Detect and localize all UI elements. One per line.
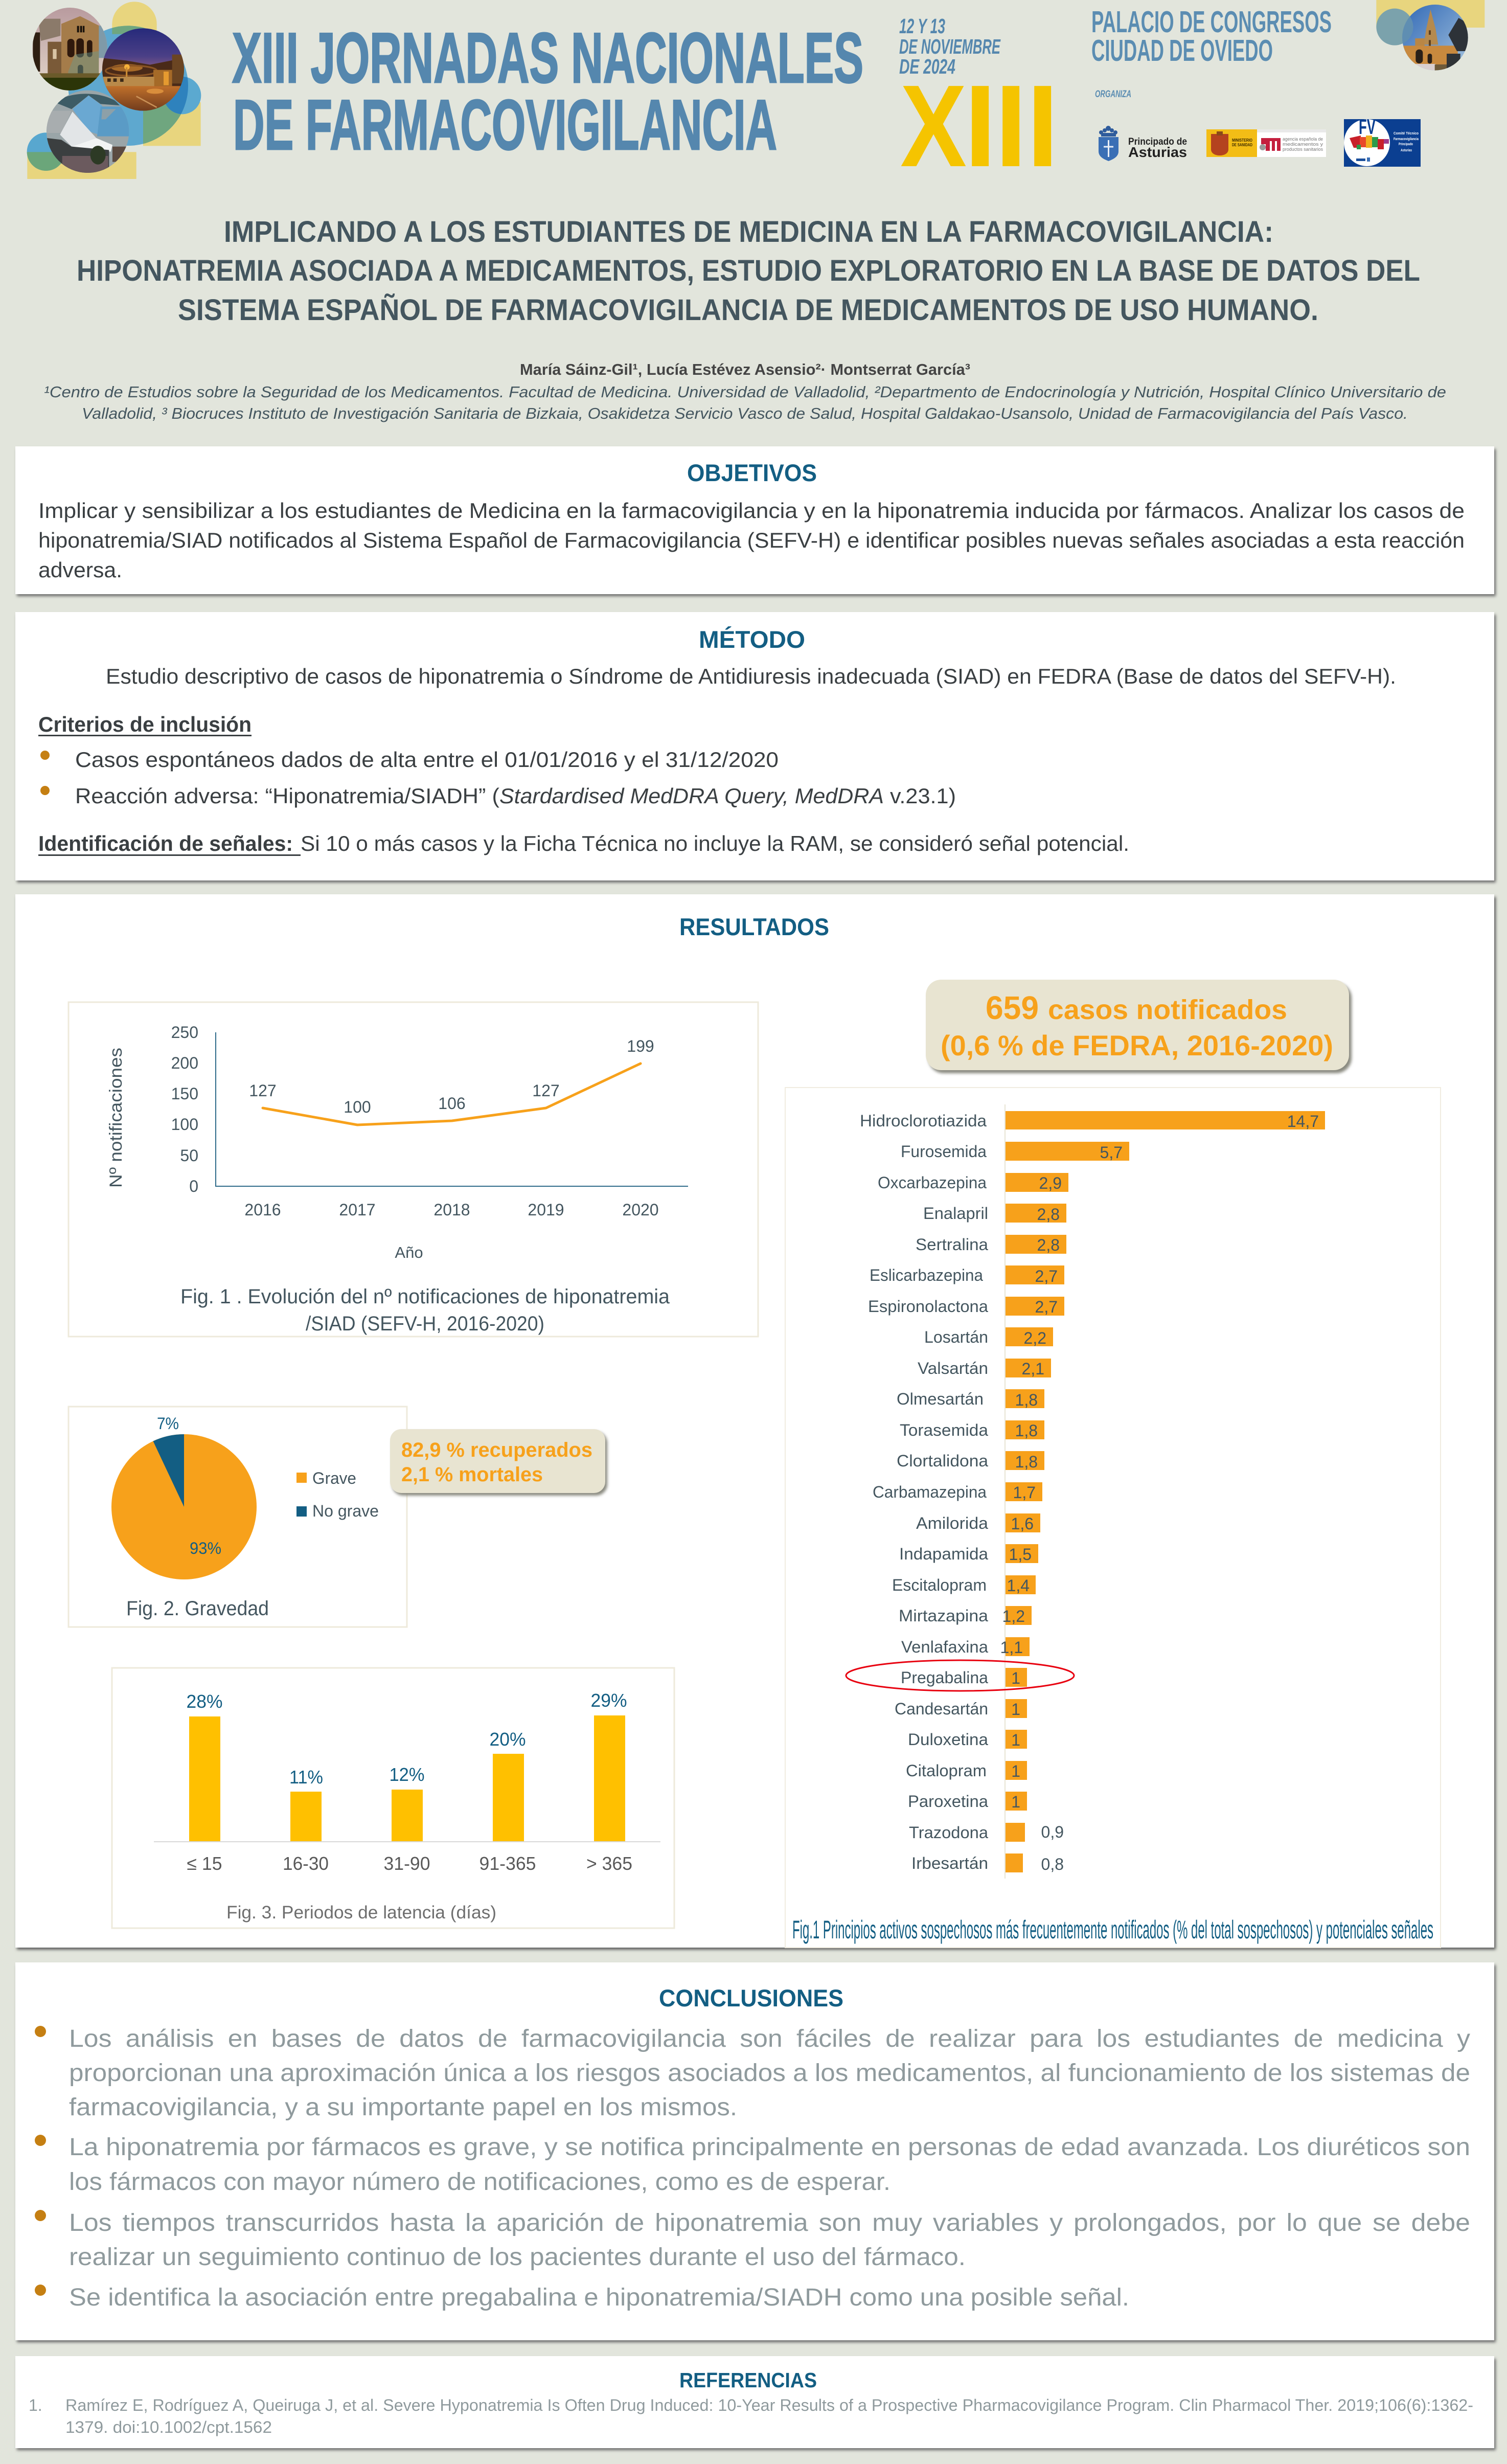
- inclusion criterion 2: [40, 784, 956, 808]
- value labels: [1000, 1112, 1319, 1873]
- category labels: 31-90: [383, 1853, 430, 1874]
- logo: Ministerio de Sanidad and AEMPS: MINISTERIO: [1232, 138, 1252, 143]
- data labels: 127: [249, 1081, 277, 1100]
- value labels: 1,5: [1009, 1545, 1032, 1564]
- value labels: 2,7: [1035, 1298, 1058, 1316]
- figure 1 caption: Fig. 1 . Evolución del nº notificaciones de hiponatremia: [180, 1285, 670, 1308]
- pie labels: [157, 1414, 221, 1557]
- drug labels: Irbesartán: [911, 1854, 988, 1872]
- logo: FV farmacovigilancia: Principado: [1399, 143, 1413, 146]
- affiliations: [44, 383, 1446, 422]
- decorative photo collage left: [26, 2, 201, 179]
- value labels: 2,2: [1024, 1329, 1046, 1347]
- drug labels: Amilorida: [916, 1514, 988, 1532]
- figure 1 caption: /SIAD (SEFV-H, 2016-2020): [306, 1313, 544, 1335]
- drug labels: Valsartán: [918, 1359, 988, 1377]
- highlight ellipse: pregabalina: [846, 1660, 1074, 1691]
- drug labels: Espironolactona: [868, 1297, 988, 1316]
- conclusion 2: La hiponatremia por fármacos es grave, y se notifica principalmente en personas de edad avanzada. Los diuréticos son: [69, 2134, 1470, 2161]
- event date: DE NOVIEMBRE: [899, 35, 1001, 58]
- inclusion criterion 1: Casos espontáneos dados de alta entre el 01/01/2016 y el 31/12/2020: [75, 748, 779, 772]
- drug labels: Oxcarbazepina: [878, 1173, 987, 1192]
- value labels: 1: [1011, 1731, 1020, 1749]
- conclusion 1: [35, 2025, 1470, 2121]
- affiliations: ¹Centro de Estudios sobre la Seguridad de los Medicamentos. Facultad de Medicina. Universidad de Valladolid, ²Departmento de Endocrinología y Nutrición, Hospital Clínico Universitario de: [44, 383, 1446, 401]
- data labels: 100: [344, 1098, 371, 1116]
- value labels: [186, 1690, 627, 1788]
- panel: resultados: [15, 894, 1496, 1950]
- category labels: ≤ 15: [187, 1853, 222, 1874]
- conclusion 3: realizar un seguimiento continuo de los pacientes durante el uso del fármaco.: [69, 2244, 966, 2271]
- main title XIII Jornadas: DE FARMACOVIGILANCIA: [233, 85, 777, 165]
- pie: [111, 1434, 257, 1579]
- logo: Principado de Asturias: Principado de: [1128, 137, 1187, 147]
- logo: FV farmacovigilancia: Farmacovigilancia: [1394, 138, 1419, 141]
- value labels: 0,9: [1041, 1823, 1064, 1841]
- callout: cases reported: (0,6 % de FEDRA, 2016-2020): [941, 1029, 1333, 1061]
- panel: referencias: [15, 2356, 1496, 2450]
- large XIII numeral: I: [1026, 61, 1059, 191]
- logo: Principado de Asturias: [1099, 126, 1187, 161]
- y axis labels: 200: [171, 1054, 198, 1072]
- figure 1 caption: [180, 1285, 670, 1335]
- conclusion 3: [35, 2209, 1470, 2271]
- value labels: 12%: [390, 1764, 424, 1785]
- figure 2 caption: Fig. 2. Gravedad: [126, 1597, 269, 1620]
- inclusion criterion 2: Stardardised MedDRA Query, MedDRA: [499, 784, 884, 808]
- venue: CIUDAD DE OVIEDO: [1091, 34, 1273, 67]
- pie legend: Grave: [312, 1469, 356, 1487]
- reference 1: 1.: [29, 2396, 42, 2414]
- logo: Ministerio de Sanidad and AEMPS: agencia española de: [1283, 137, 1323, 142]
- value labels: 1,1: [1000, 1638, 1023, 1657]
- value labels: 1: [1011, 1669, 1020, 1687]
- logo: FV farmacovigilancia: FV: [1359, 115, 1376, 139]
- large XIII numeral: I: [995, 61, 1027, 191]
- drug labels: Escitalopram: [892, 1576, 987, 1594]
- pie labels: 93%: [190, 1539, 221, 1557]
- poster title: [77, 215, 1420, 327]
- x axis labels: 2019: [528, 1201, 564, 1219]
- category labels: 16-30: [283, 1853, 329, 1874]
- drug labels: Hidroclorotiazida: [860, 1112, 987, 1130]
- large XIII numeral: X: [900, 61, 967, 191]
- category labels: > 365: [586, 1853, 632, 1874]
- line chart: notifications per year: [68, 1002, 758, 1337]
- bar chart: suspected active substances: [785, 1088, 1441, 1948]
- header banner: [26, 0, 1485, 191]
- objectives text: Implicar y sensibilizar a los estudiantes de Medicina en la farmacovigilancia y en la hiponatremia inducida por fármacos. Analizar los casos de: [38, 499, 1465, 523]
- event date: 12 Y 13: [899, 14, 945, 38]
- data line: [263, 1064, 641, 1125]
- drug labels: Carbamazepina: [873, 1483, 987, 1501]
- logo: Ministerio de Sanidad and AEMPS: DE SANIDAD: [1232, 143, 1252, 147]
- panel: conclusiones: [15, 1962, 1496, 2342]
- drug labels: Torasemida: [900, 1421, 988, 1439]
- bars: [189, 1715, 625, 1842]
- callout: recovery and mortality: 2,1 % mortales: [401, 1463, 543, 1486]
- drug labels: Furosemida: [901, 1142, 987, 1161]
- pie chart: severity: [68, 1407, 407, 1627]
- value labels: 5,7: [1100, 1143, 1123, 1162]
- drug labels: Olmesartán: [897, 1390, 984, 1408]
- figure 3 caption: Fig. 3. Periodos de latencia (días): [226, 1903, 496, 1923]
- drug labels: Eslicarbazepina: [870, 1266, 983, 1284]
- event date: DE 2024: [899, 55, 955, 78]
- venue: [1091, 5, 1332, 67]
- drug labels: Duloxetina: [908, 1730, 988, 1749]
- signal identification: Si 10 o más casos y la Ficha Técnica no incluye la RAM, se consideró señal potencial.: [301, 831, 1129, 855]
- data labels: 127: [532, 1081, 560, 1100]
- x axis title: Año: [395, 1244, 423, 1261]
- drug labels: Losartán: [924, 1328, 988, 1346]
- logo: FV farmacovigilancia: Comité Técnico: [1394, 132, 1419, 135]
- logo: FV farmacovigilancia: [1344, 115, 1421, 167]
- data labels: 199: [627, 1037, 654, 1055]
- main title XIII Jornadas: XIII JORNADAS NACIONALES: [232, 18, 863, 98]
- bars: [1006, 1111, 1325, 1872]
- pie legend: [296, 1469, 379, 1520]
- value labels: 1,8: [1015, 1391, 1038, 1409]
- y axis labels: 150: [171, 1084, 198, 1103]
- value labels: 29%: [591, 1690, 627, 1711]
- conclusion 1: farmacovigilancia, y a su importante papel en los mismos.: [69, 2094, 737, 2121]
- drug labels: Citalopram: [906, 1761, 987, 1780]
- drug labels: Trazodona: [909, 1823, 988, 1842]
- reference 1: 1379. doi:10.1002/cpt.1562: [65, 2418, 272, 2436]
- event date: [899, 14, 1001, 78]
- conclusion 2: los fármacos con mayor número de notificaciones, como es de esperar.: [69, 2168, 890, 2196]
- logo: Ministerio de Sanidad and AEMPS: medicamentos y: [1283, 142, 1323, 147]
- drug labels: Venlafaxina: [901, 1638, 988, 1656]
- value labels: 20%: [490, 1729, 526, 1750]
- value labels: 1,2: [1002, 1607, 1025, 1625]
- drug labels: Pregabalina: [901, 1668, 988, 1687]
- value labels: 2,8: [1037, 1205, 1060, 1224]
- heading: resultados: RESULTADOS: [679, 913, 829, 940]
- signal identification: Identificación de señales:: [38, 831, 293, 855]
- callout: cases reported: [926, 980, 1352, 1073]
- y axis title: Nº notificaciones: [106, 1048, 126, 1188]
- objectives text: adversa.: [38, 558, 122, 582]
- organiser label: ORGANIZA: [1095, 89, 1131, 100]
- y axis labels: 0: [189, 1177, 198, 1195]
- heading: metodo: MÉTODO: [699, 626, 805, 653]
- category labels: 91-365: [480, 1853, 536, 1874]
- panel: objetivos: [15, 446, 1496, 596]
- drug labels: Candesartán: [895, 1700, 988, 1718]
- value labels: 14,7: [1287, 1112, 1319, 1131]
- conclusion 3: Los tiempos transcurridos hasta la aparición de hiponatremia son muy variables y prolongados, por lo que se debe: [69, 2209, 1470, 2236]
- logo: Ministerio de Sanidad and AEMPS: productos sanitarios: [1283, 147, 1323, 152]
- drug labels: Indapamida: [899, 1545, 988, 1563]
- callout: cases reported: casos notificados: [1048, 994, 1287, 1025]
- poster title: SISTEMA ESPAÑOL DE FARMACOVIGILANCIA DE MEDICAMENTOS DE USO HUMANO.: [178, 293, 1318, 327]
- poster title: IMPLICANDO A LOS ESTUDIANTES DE MEDICINA EN LA FARMACOVIGILANCIA:: [224, 215, 1273, 248]
- callout: recovery and mortality: [390, 1429, 607, 1496]
- large XIII numeral: I: [964, 61, 996, 191]
- data labels: [249, 1037, 654, 1116]
- value labels: 1,6: [1011, 1514, 1034, 1533]
- heading: objetivos: OBJETIVOS: [687, 459, 817, 486]
- reference 1: [29, 2396, 1473, 2436]
- value labels: 1,8: [1015, 1453, 1038, 1471]
- data labels: 106: [438, 1094, 466, 1113]
- inclusion criterion 2: Reacción adversa: “Hiponatremia/SIADH” (: [75, 784, 499, 808]
- value labels: 2,8: [1037, 1236, 1060, 1254]
- authors: María Sáinz-Gil¹, Lucía Estévez Asensio²· Montserrat García³: [520, 360, 970, 378]
- affiliations: Valladolid, ³ Biocruces Instituto de Investigación Sanitaria de Bizkaia, Osakidetza Servicio Vasco de Salud, Hospital Galdakao-Usansolo, Unidad de Farmacovigilancia del País Vasco.: [82, 404, 1408, 422]
- x axis labels: [244, 1201, 659, 1219]
- value labels: 2,7: [1035, 1267, 1058, 1285]
- conclusion 1: proporcionan una aproximación única a los riesgos asociados a los medicamentos, al funcionamiento de los sistemas de: [69, 2060, 1470, 2087]
- conclusion 1: Los análisis en bases de datos de farmacovigilancia son fáciles de realizar para los estudiantes de medicina y: [69, 2025, 1470, 2052]
- drug labels: Clortalidona: [897, 1452, 988, 1470]
- value labels: 2,1: [1022, 1360, 1044, 1378]
- value labels: 28%: [186, 1691, 223, 1712]
- decorative photo top right: [1376, 0, 1485, 72]
- panel: metodo: [15, 612, 1496, 883]
- drug labels: Sertralina: [916, 1235, 988, 1254]
- conclusion 2: [35, 2134, 1470, 2196]
- inclusion criteria heading: Criterios de inclusión: [38, 712, 252, 736]
- x axis labels: 2016: [244, 1201, 281, 1219]
- value labels: 1: [1011, 1700, 1020, 1719]
- poster title: HIPONATREMIA ASOCIADA A MEDICAMENTOS, ESTUDIO EXPLORATORIO EN LA BASE DE DATOS DEL: [77, 254, 1420, 287]
- x axis labels: 2020: [622, 1201, 659, 1219]
- drug labels: Paroxetina: [908, 1792, 988, 1811]
- inclusion criterion 2: v.23.1): [890, 784, 956, 808]
- reference 1: Ramírez E, Rodríguez A, Queiruga J, et al. Severe Hyponatremia Is Often Drug Induced: 10-Year Results of a Prospective Pharmacovigilance Program. Clin Pharmacol Ther. 2019;106(6):1362-: [65, 2396, 1473, 2414]
- drug labels: [860, 1112, 988, 1872]
- main title XIII Jornadas: [232, 18, 863, 165]
- value labels: 2,9: [1039, 1174, 1062, 1192]
- y axis labels: 250: [171, 1023, 198, 1042]
- pie legend: No grave: [312, 1502, 379, 1520]
- drug labels: Mirtazapina: [899, 1607, 988, 1625]
- pie labels: 7%: [157, 1414, 179, 1433]
- conclusion 4: Se identifica la asociación entre pregabalina e hiponatremia/SIADH como una posible señal.: [69, 2284, 1129, 2311]
- objectives text: hiponatremia/SIAD notificados al Sistema Español de Farmacovigilancia (SEFV-H) e identificar posibles nuevas señales asociadas a esta reacción: [38, 528, 1465, 552]
- x axis labels: 2018: [433, 1201, 470, 1219]
- large XIII numeral: [900, 61, 1059, 191]
- heading: referencias: REFERENCIAS: [679, 2368, 817, 2392]
- callout: cases reported: 659: [986, 989, 1039, 1026]
- objectives text: [38, 499, 1465, 582]
- y axis labels: [171, 1023, 198, 1195]
- value labels: 11%: [289, 1767, 323, 1788]
- logo: Ministerio de Sanidad and AEMPS: [1206, 129, 1326, 157]
- heading: conclusiones: CONCLUSIONES: [659, 1984, 843, 2011]
- x axis labels: 2017: [339, 1201, 376, 1219]
- category labels: [187, 1853, 632, 1874]
- logo: FV farmacovigilancia: Asturias: [1401, 149, 1412, 152]
- value labels: 1: [1011, 1793, 1020, 1811]
- y axis labels: 50: [180, 1146, 198, 1165]
- value labels: 1,8: [1015, 1421, 1038, 1440]
- bar chart: latency periods: [112, 1668, 674, 1928]
- venue: PALACIO DE CONGRESOS: [1091, 5, 1332, 39]
- value labels: 1,4: [1007, 1576, 1030, 1595]
- y axis labels: 100: [171, 1115, 198, 1134]
- callout: recovery and mortality: 82,9 % recuperados: [401, 1439, 592, 1461]
- value labels: 1,7: [1013, 1483, 1036, 1502]
- value labels: 0,8: [1041, 1855, 1064, 1873]
- value labels: 1: [1011, 1762, 1020, 1780]
- logo: Principado de Asturias: Asturias: [1128, 144, 1187, 160]
- method description: Estudio descriptivo de casos de hiponatremia o Síndrome de Antidiuresis inadecuada (SIAD) en FEDRA (Base de datos del SEFV-H).: [106, 664, 1396, 688]
- drug labels: Enalapril: [923, 1204, 988, 1223]
